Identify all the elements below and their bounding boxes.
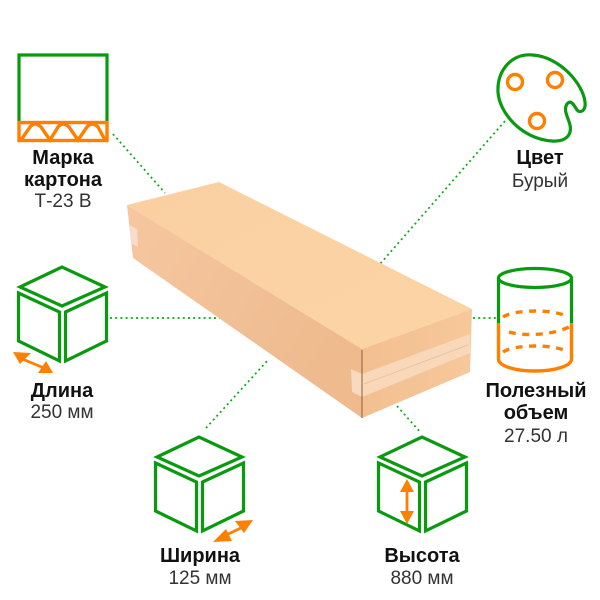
connector: height bbox=[397, 406, 421, 433]
label: colour: Цвет bbox=[516, 147, 564, 169]
label: carton grade bbox=[24, 147, 103, 212]
connector: width bbox=[206, 360, 268, 428]
label: width: Ширина bbox=[160, 545, 241, 567]
label: carton grade: Марка bbox=[32, 147, 95, 169]
label: carton grade: картона bbox=[24, 169, 103, 191]
icon: carton grade bbox=[19, 55, 107, 140]
icon: cube with width arrow bbox=[156, 437, 253, 542]
label: carton grade: Т-23 В bbox=[34, 191, 92, 212]
label: usable volume: 27.50 л bbox=[504, 426, 568, 447]
label: length: 250 мм bbox=[30, 402, 94, 423]
arrow: width bbox=[213, 520, 253, 542]
connector: volume bbox=[473, 317, 497, 319]
label: length bbox=[30, 380, 94, 423]
connector: carton grade bbox=[113, 134, 165, 193]
label: colour: Бурый bbox=[512, 171, 568, 192]
arrow: height bbox=[400, 479, 414, 524]
label: width bbox=[160, 545, 241, 589]
box long side face bbox=[127, 205, 362, 418]
box corner edge bbox=[361, 350, 363, 418]
label: colour bbox=[512, 147, 568, 192]
label: width: 125 мм bbox=[168, 568, 232, 589]
icon: cylinder volume bbox=[498, 268, 572, 371]
label: height: 880 мм bbox=[390, 568, 454, 589]
icon: palette bbox=[498, 55, 585, 141]
connector: length bbox=[110, 317, 220, 319]
label: usable volume: Полезный bbox=[485, 380, 587, 402]
box top face bbox=[127, 182, 472, 349]
label: usable volume bbox=[485, 380, 587, 447]
label: height: Высота bbox=[384, 545, 461, 567]
label: length: Длина bbox=[31, 380, 94, 402]
connector: colour bbox=[380, 121, 505, 264]
box end face bbox=[362, 309, 472, 418]
icon: cube with height arrow bbox=[378, 437, 466, 531]
tape on far end bbox=[129, 225, 138, 247]
arrow: length bbox=[13, 352, 53, 373]
icon: cube with length arrow bbox=[13, 267, 106, 373]
label: usable volume: объем bbox=[504, 402, 568, 424]
tape on long side bbox=[351, 369, 362, 397]
cardboard box bbox=[127, 182, 472, 418]
packing tape on end face bbox=[362, 334, 470, 397]
label: height bbox=[384, 545, 461, 589]
